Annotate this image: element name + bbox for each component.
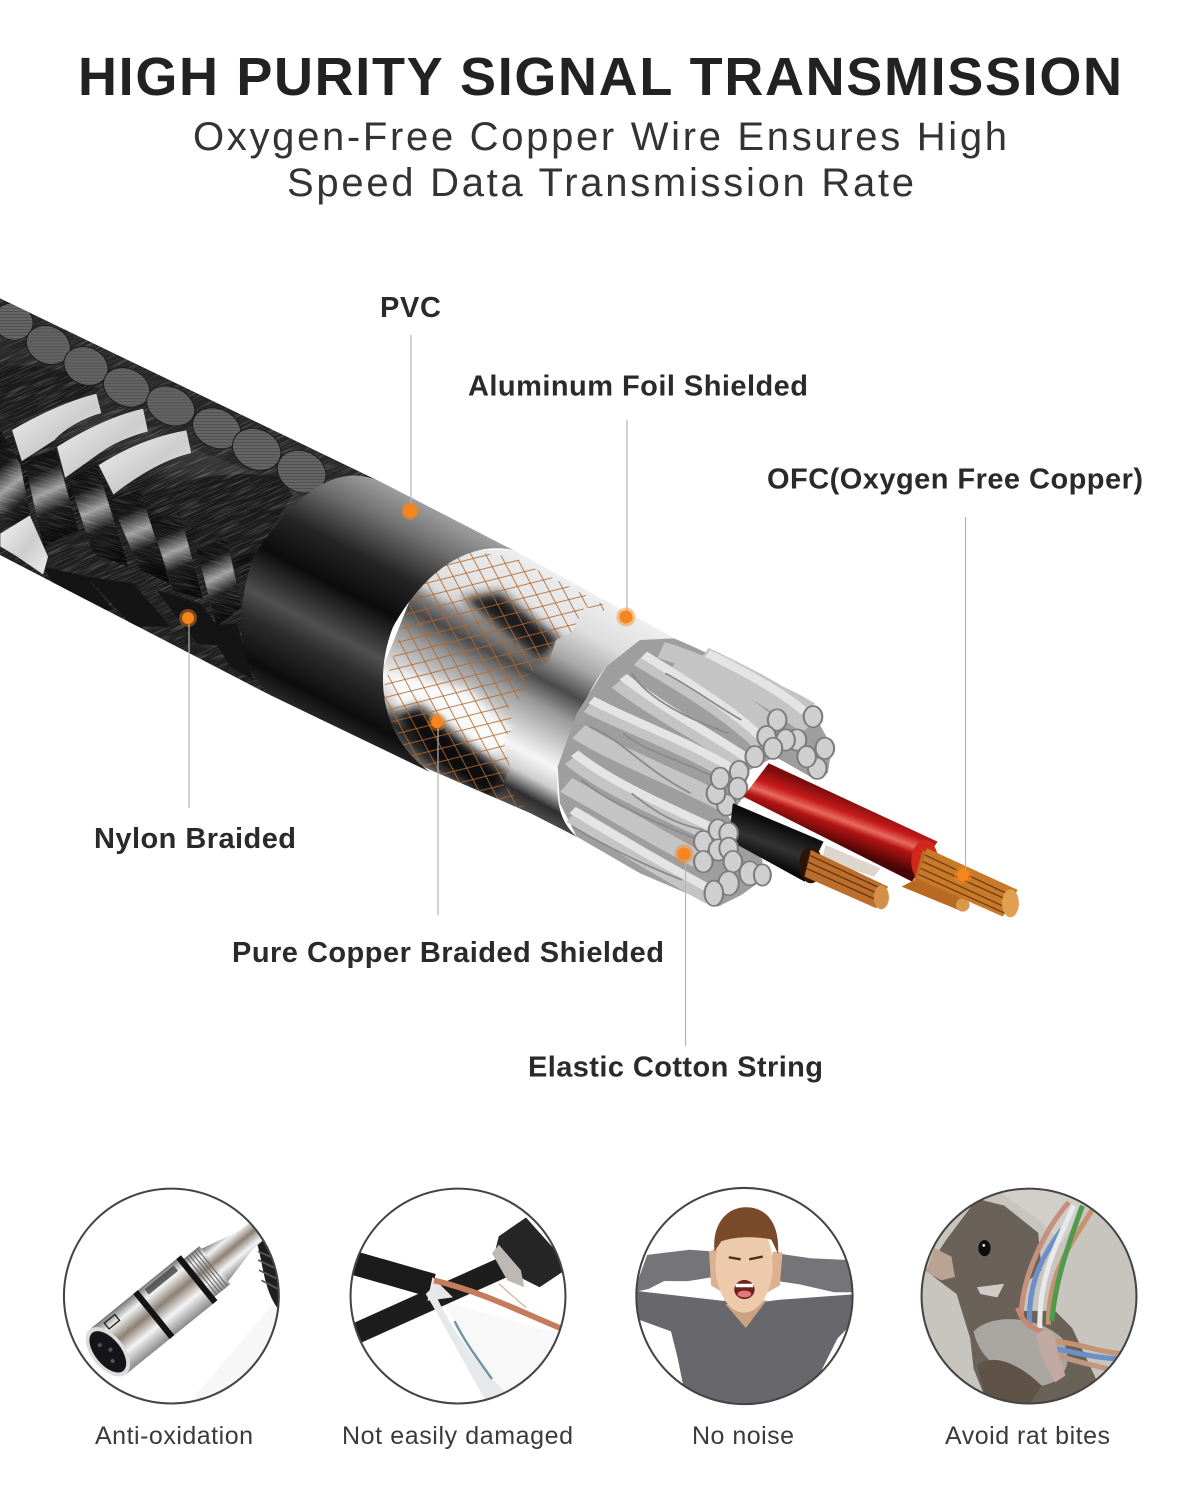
- subtitle: Speed Data Transmission Rate: [287, 161, 914, 205]
- PVC jacket: [241, 476, 513, 772]
- black wire: [729, 803, 889, 909]
- white tiles: [0, 393, 192, 575]
- label: OFC: OFC(Oxygen Free Copper): [767, 464, 1143, 496]
- nylon braided sheath: [0, 298, 376, 695]
- title: HIGH PURITY SIGNAL TRANSMISSION: [78, 47, 1122, 107]
- front strand ends: [694, 819, 771, 906]
- red wire: [743, 763, 1019, 917]
- foil and copper shield: [370, 550, 674, 837]
- label: Elastic Cotton String: Elastic Cotton String: [528, 1052, 823, 1084]
- subtitle: [193, 115, 1007, 205]
- photo circle: man covering ears: [634, 1188, 858, 1410]
- callout dots: [179, 502, 972, 884]
- caption: Not easily damaged: Not easily damaged: [342, 1422, 573, 1450]
- caption: Avoid rat bites: Avoid rat bites: [945, 1422, 1110, 1450]
- subtitle: Oxygen-Free Copper Wire Ensures High: [193, 115, 1007, 159]
- strand end clusters: [707, 706, 834, 816]
- label: Aluminum Foil Shielded: Aluminum Foil Shielded: [468, 370, 808, 402]
- photo circle: damaged cable: [349, 1189, 570, 1403]
- label: Pure Copper Braided Shielded: Pure Copper Braided Shielded: [232, 937, 664, 969]
- grey ridge lumps: [0, 297, 333, 501]
- leader lines: [189, 335, 966, 1046]
- photo circle: XLR connector: [64, 1189, 295, 1406]
- caption: No noise: No noise: [692, 1422, 794, 1450]
- elastic cotton strands: [558, 638, 1019, 917]
- cable illustration: [0, 298, 1019, 918]
- caption: Anti-oxidation: Anti-oxidation: [95, 1422, 253, 1450]
- photo circle: rat biting wires: [922, 1189, 1136, 1410]
- label: Nylon Braided: Nylon Braided: [94, 823, 296, 855]
- shirt: [634, 1291, 858, 1410]
- label: PVC: PVC: [380, 292, 441, 324]
